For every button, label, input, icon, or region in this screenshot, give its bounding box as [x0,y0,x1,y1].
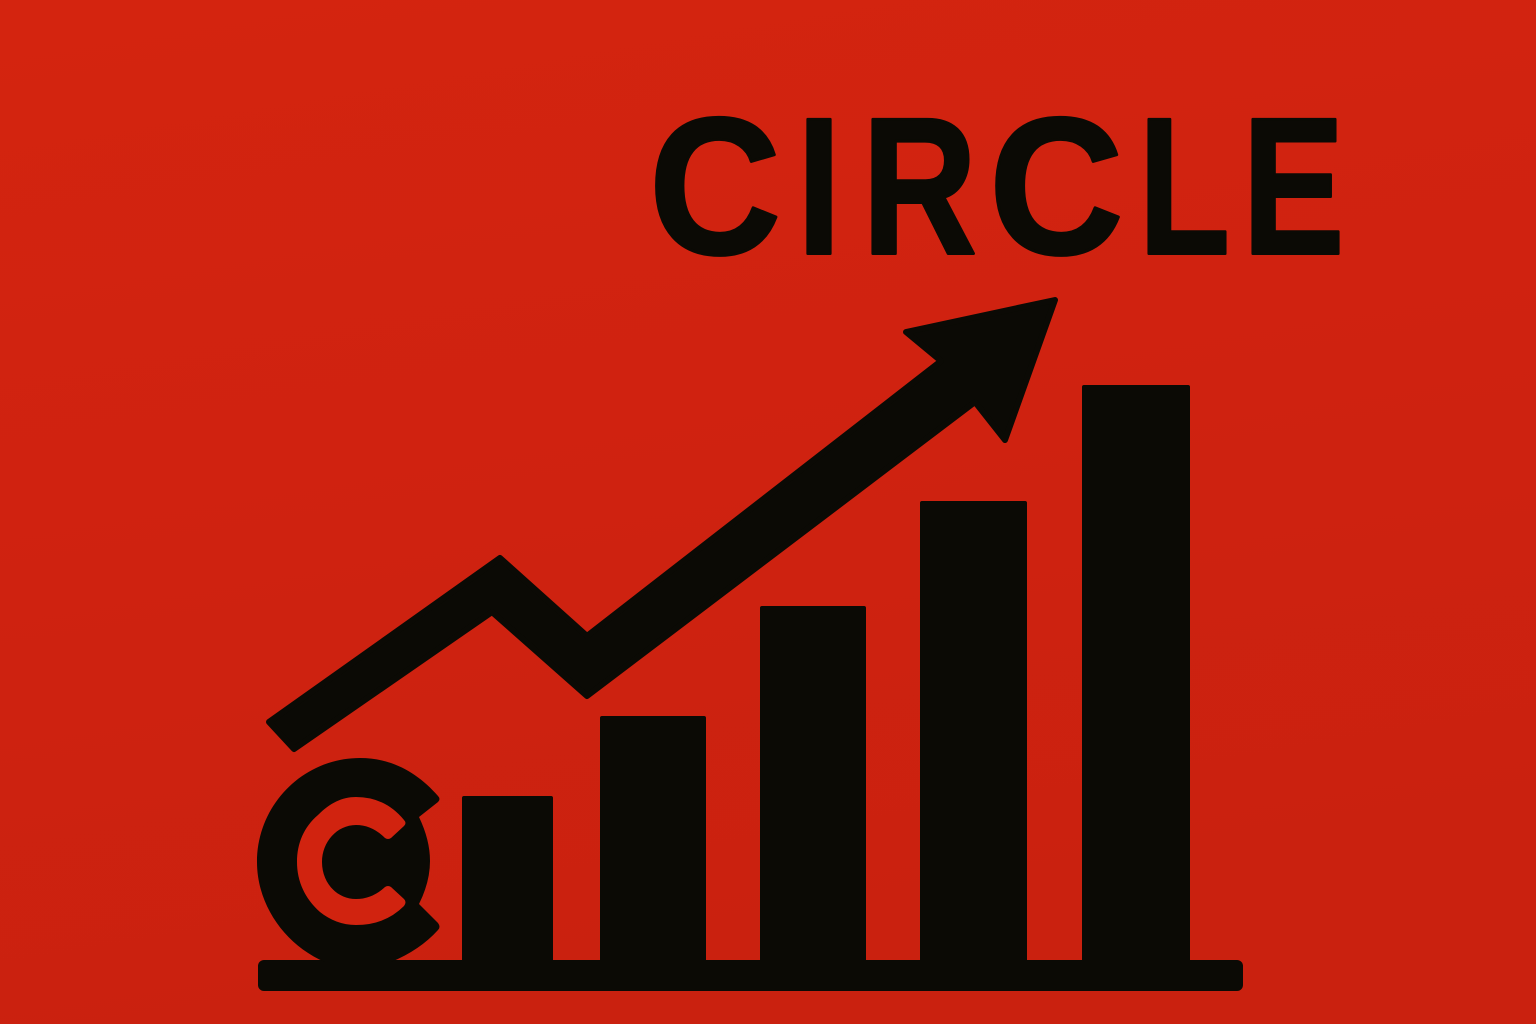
logo outer ring [257,758,440,962]
title: R [862,78,977,296]
title: C [649,78,781,296]
bar 2 [600,716,706,966]
icon: circle logo [257,758,440,962]
bar 3 [760,606,866,966]
bar 1 [462,796,553,966]
bar chart [258,385,1243,991]
title: C [989,78,1124,296]
title: I [797,78,841,296]
chart baseline [258,960,1243,991]
logo inner C [297,797,406,925]
arrow: rising trend line [269,300,1055,749]
bar 5 [1082,385,1190,966]
title: L [1139,78,1230,296]
title: E [1242,78,1344,296]
bar 4 [920,501,1027,966]
